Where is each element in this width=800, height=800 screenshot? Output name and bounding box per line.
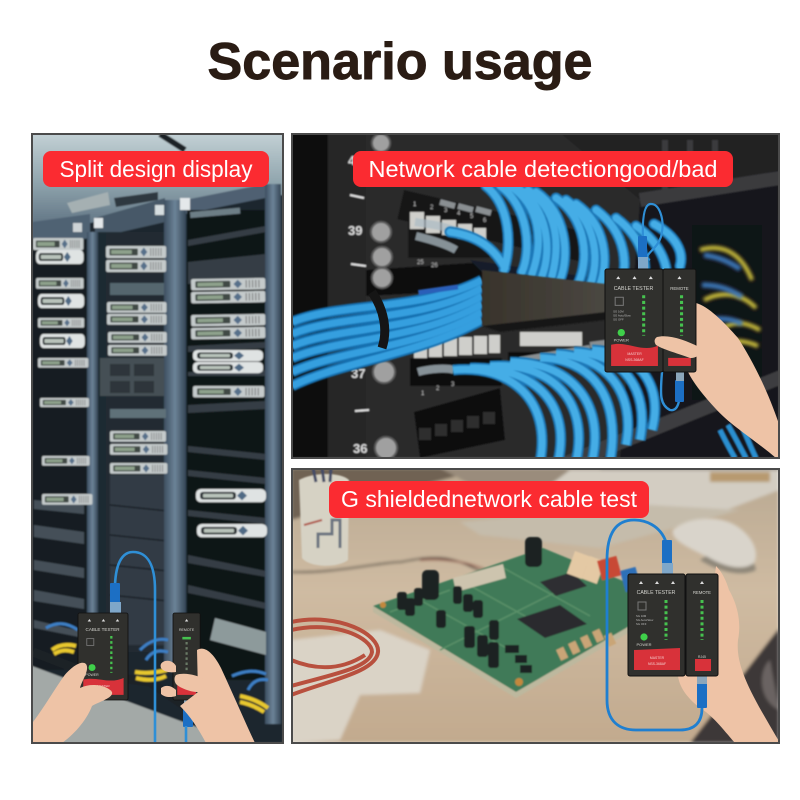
panel frame: [292, 134, 779, 458]
patch panel and blue cables photo: 2: [430, 205, 434, 211]
cable duct: [482, 270, 606, 332]
cable tester remote unit: REMOTE: [670, 286, 689, 291]
panel frame: [32, 134, 283, 743]
patch panel and blue cables photo: 39: [348, 223, 362, 238]
cable tester master unit: MASTER: [97, 684, 110, 688]
cable tester master unit: POWER: [614, 338, 629, 343]
icon: hand behind tester: [688, 303, 781, 458]
circuit board: [373, 537, 650, 698]
cable tester master unit: CABLE TESTER: [614, 286, 653, 292]
patch panel and blue cables photo: 6: [483, 218, 487, 224]
cable tester master unit: POWER: [636, 642, 652, 647]
blue network cable: [110, 552, 193, 743]
label: network cable detection: [353, 151, 733, 187]
icon: hands holding testers: [33, 649, 255, 743]
cable tester master unit: CABLE TESTER: [86, 627, 120, 632]
patch panel and blue cables photo: 25: [417, 260, 424, 266]
cup of pens: [299, 468, 349, 566]
cable tester remote unit: [663, 269, 696, 372]
cable tester master unit: [78, 613, 128, 700]
computer mouse: [673, 519, 756, 573]
cable tester master unit: CABLE TESTER: [637, 590, 676, 596]
panel: split design display: [32, 133, 283, 743]
cable tester remote unit: [173, 613, 200, 700]
cable tester master unit: SG OFF: [636, 622, 647, 626]
cable tester remote unit: REMOTE: [179, 628, 195, 632]
cable tester master unit: MASTER: [627, 352, 642, 356]
label: shielded network cable test: G shieldednetwork cable test: [341, 486, 638, 512]
cable tester master unit: SG Auto/Slow: [613, 313, 632, 317]
cable tester master unit: POWER: [85, 673, 99, 677]
blue patch cables: [292, 186, 681, 462]
cable tester master unit: NSS-368AF: [625, 358, 644, 362]
red cable coil: [291, 620, 378, 695]
cable tester remote unit: REMOTE: [693, 590, 711, 595]
title: Scenario usage: [208, 33, 592, 91]
label: network cable detection: Network cable detectiongood/bad: [368, 156, 718, 182]
panel: shielded network cable test: [291, 468, 780, 743]
blue network cable: [607, 520, 707, 730]
label: split design display: [43, 151, 269, 187]
cable tester master unit: [628, 574, 685, 676]
cable tester master unit: NSS-368AF: [648, 662, 666, 666]
blue network cable: [638, 204, 684, 410]
panel frame: [292, 469, 779, 743]
desk background photo: [291, 468, 779, 743]
patch panel and blue cables photo: 4: [457, 211, 461, 217]
cable tester master unit: SG Auto/Slow: [636, 618, 654, 622]
icon: hand behind tester: [678, 566, 780, 743]
patch panel and blue cables photo: 1: [421, 391, 425, 397]
label: split design display: Split design display: [60, 156, 253, 182]
patch panel and blue cables photo: [291, 133, 780, 459]
patch panel and blue cables photo: 5: [470, 214, 474, 220]
cable tester remote unit: RJ45: [698, 655, 706, 659]
patch panel and blue cables photo: 36: [353, 441, 367, 456]
panel: network cable detection: [291, 133, 781, 462]
cable tie: [372, 292, 385, 348]
patch panel and blue cables photo: 3: [444, 208, 448, 214]
cable tester master unit: SG OFF: [613, 318, 624, 322]
patch panel and blue cables photo: 1: [413, 202, 417, 208]
cable tester master unit: SG 10M: [636, 614, 647, 618]
data centre racks photo: [32, 133, 283, 743]
icon: thumb over remote: [655, 336, 700, 358]
patch panel and blue cables photo: 26: [431, 263, 438, 269]
cable tester master unit: NSS-368AF: [95, 689, 112, 693]
cable tester master unit: [605, 269, 663, 372]
patch panel and blue cables photo: 4: [348, 153, 356, 168]
patch panel and blue cables photo: 2: [436, 386, 440, 392]
cable tester remote unit: [686, 574, 718, 676]
cable tester master unit: MASTER: [650, 656, 665, 660]
label: shielded network cable test: [329, 481, 649, 518]
patch panel and blue cables photo: 3: [451, 382, 455, 388]
patch panel and blue cables photo: 37: [351, 366, 365, 381]
cable tester master unit: SG 10M: [613, 309, 624, 313]
